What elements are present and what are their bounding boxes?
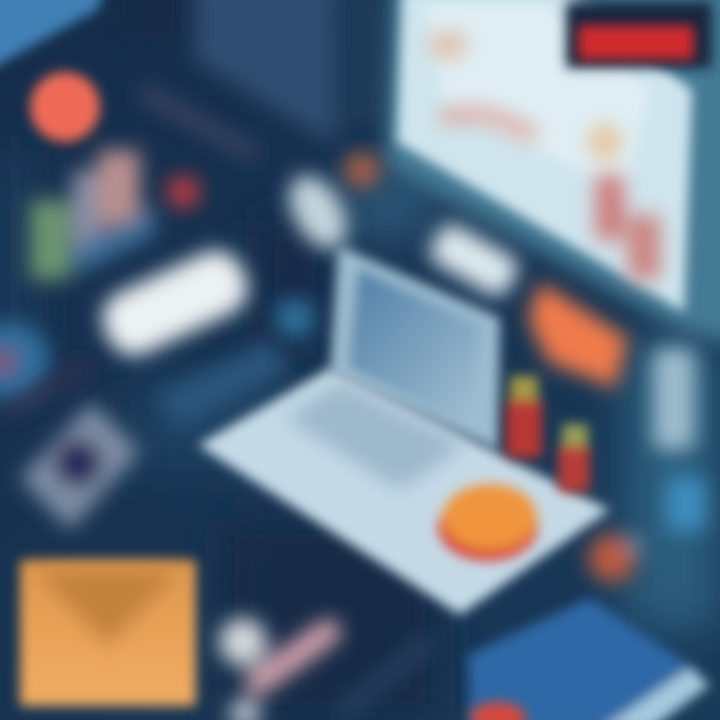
icon: small orange dot [344, 152, 380, 188]
tablet bottom right [468, 598, 710, 720]
faint dark text row [140, 90, 255, 155]
white capsule near laptop [277, 165, 359, 259]
dark bar beside laptop [155, 340, 290, 430]
background tonal shading [0, 150, 720, 720]
red bottle right [558, 424, 590, 492]
monitor screen [397, 0, 692, 312]
panel: top-left blue card [0, 0, 105, 75]
panel: large monitor with chart [385, 0, 720, 345]
check mark badge [219, 618, 328, 720]
red bottle left [506, 376, 542, 458]
orange coin [438, 484, 538, 561]
envelope flap [35, 570, 180, 645]
icon: orange circle [30, 72, 100, 142]
envelope [20, 560, 196, 706]
blue dot [275, 298, 315, 338]
laptop trackpad [285, 382, 465, 490]
laptop base [198, 368, 610, 615]
red button bottom [470, 702, 526, 720]
right blue square [666, 476, 706, 532]
left blue circle icon [0, 322, 50, 402]
dark red streak [0, 365, 90, 415]
laptop [198, 245, 610, 615]
right pill [653, 348, 695, 450]
laptop screen [330, 245, 500, 450]
monitor chart marks [428, 31, 660, 280]
panel: top dark server block [115, 0, 390, 145]
red badge [566, 2, 712, 68]
phone icon [20, 402, 140, 530]
small orange-red cluster [588, 534, 643, 582]
monitor frame [385, 0, 720, 345]
white pill button [93, 241, 257, 365]
dark lower stripes [340, 640, 430, 715]
white tag [425, 219, 523, 301]
bar chart [30, 150, 155, 280]
orange badge [528, 282, 628, 388]
icon: small red dot [166, 175, 200, 209]
